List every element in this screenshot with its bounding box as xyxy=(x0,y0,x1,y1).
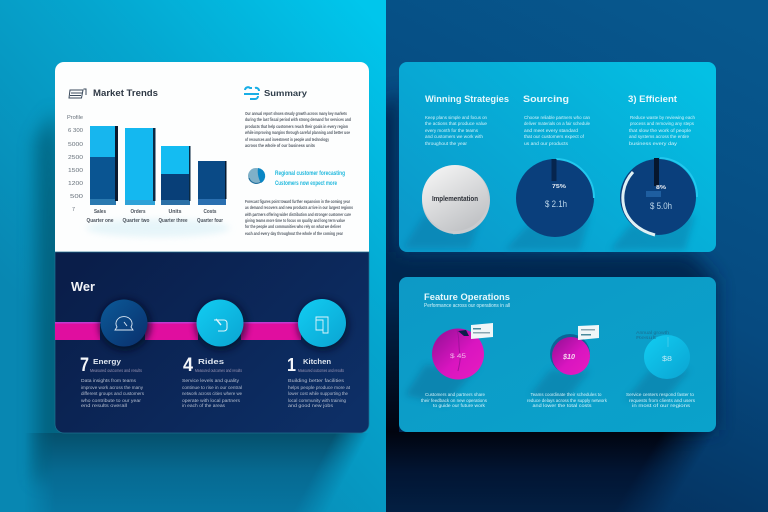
summary text block: of resources and investment in people and technology xyxy=(245,137,329,142)
summary text block: across the whole of our business units xyxy=(245,143,315,148)
icon: globe badge xyxy=(248,168,265,184)
column text: first: every month for the teams xyxy=(425,128,479,133)
summary text block: during the last fiscal period with strong demand for services and xyxy=(245,117,351,122)
y axis labels: Profile xyxy=(67,115,83,121)
callout text: Customers now expect more xyxy=(275,181,337,187)
step 2 text: 4 xyxy=(183,355,193,376)
callout text: Regional customer forecasting xyxy=(275,171,345,177)
step 2 node xyxy=(195,299,247,351)
panel subheading: Performance across our operations in all xyxy=(424,303,510,309)
detail text block: Forecast figures point toward further expansion in the coming year xyxy=(245,199,350,204)
step 2 text: network across cities where we xyxy=(182,391,242,396)
gauge: silver xyxy=(403,165,490,248)
step 2 text: Measured outcomes and results xyxy=(195,368,243,373)
bar 3 xyxy=(161,146,190,205)
sphere: cyan: $8 xyxy=(662,356,672,363)
caption: first: their feedback on new operations xyxy=(421,398,488,403)
step 2 text: Rides xyxy=(198,359,224,366)
column text: first: and customers we work with xyxy=(425,134,483,139)
icon: table xyxy=(69,89,86,98)
column headings: 3) Efficient xyxy=(628,94,677,104)
gauge: silver: Implementation xyxy=(432,196,478,203)
caption: first: to guide our future work xyxy=(433,403,486,408)
sphere: magenta small: $10 xyxy=(562,354,575,361)
sphere label: cyan: Annual growth xyxy=(636,330,670,335)
column headings: Sourcing xyxy=(523,94,569,104)
step 1 text: who contribute to our year xyxy=(81,398,142,403)
column text: second: Choose reliable partners who can xyxy=(524,115,590,120)
y axis labels: 7 xyxy=(72,207,75,213)
caption: second xyxy=(527,392,608,408)
column text: second: deliver materials on a fair schedule xyxy=(524,121,590,126)
bar 4 xyxy=(198,161,226,205)
column text: third: Reduce waste by reviewing each xyxy=(630,115,695,120)
step 1 text: Measured outcomes and results xyxy=(90,368,143,373)
panel: three gauges xyxy=(399,62,716,252)
caption: first xyxy=(421,392,488,408)
summary text block: products that help customers reach their goals in every region xyxy=(245,124,348,129)
y axis labels xyxy=(67,115,83,213)
step 3 text: helps people produce more at xyxy=(288,385,351,390)
summary text block xyxy=(244,111,351,148)
column text: second: and meet every standard xyxy=(524,128,579,133)
caption: second: Teams coordinate their schedules to xyxy=(530,392,602,397)
step 1 text xyxy=(80,355,145,408)
caption: third: in most of our regions xyxy=(632,403,691,408)
gauge: navy with white arc: 8% xyxy=(656,185,667,191)
summary text block: while improving margins through careful planning and better use xyxy=(244,130,350,135)
sphere: magenta large xyxy=(405,328,484,405)
detail text block xyxy=(244,199,353,236)
column text: third xyxy=(629,115,695,146)
step 1 text: 7 xyxy=(80,355,89,376)
step 2 text: continue to rise in our central xyxy=(182,385,242,390)
cast shadow: left panel below xyxy=(29,433,366,512)
y axis labels: 1500 xyxy=(68,168,83,174)
detail text block: giving teams more time to focus on quality and long term value xyxy=(245,218,345,223)
gauge: navy with white arc xyxy=(610,158,697,250)
step 1 text: end results overall xyxy=(81,403,127,408)
column text: third: that slow the work of people xyxy=(629,128,692,133)
summary heading: Summary xyxy=(264,88,307,98)
magenta ribbon xyxy=(55,322,305,340)
column text: third: process and removing any steps xyxy=(630,121,695,126)
bar labels: Quarter two xyxy=(122,218,150,224)
column text: first: Keep plans simple and focus on xyxy=(425,115,487,120)
column text: second xyxy=(524,115,590,146)
bar labels: Quarter four xyxy=(197,218,224,224)
glow under bar labels xyxy=(86,219,230,237)
panel: timeline xyxy=(55,252,369,433)
panel heading: Feature Operations xyxy=(424,292,510,302)
step 3 text: and good new jobs xyxy=(288,403,334,408)
step 3 text: local community with training xyxy=(288,398,346,403)
cast shadow: left panel side xyxy=(36,110,70,480)
column text: second: that our customers expect of xyxy=(524,134,585,139)
step 1 text: improve work across the many xyxy=(81,385,144,390)
gauge: navy xyxy=(505,159,594,250)
column text: third: business every day xyxy=(629,141,678,146)
y axis labels: 5000 xyxy=(68,142,83,148)
sphere label: cyan xyxy=(636,330,670,340)
bar labels: Units xyxy=(168,209,182,215)
step 3 text: lower cost while supporting the xyxy=(288,391,348,396)
caption: third: Service centers respond faster to xyxy=(626,392,694,397)
caption: second: and lower the total costs xyxy=(532,403,592,408)
gauge: navy: $ 2.1h xyxy=(545,199,567,209)
sphere label: cyan: Result xyxy=(636,335,657,340)
column text: first: throughout the year xyxy=(425,141,468,146)
step 1 text: Energy xyxy=(93,359,121,366)
sphere: magenta small xyxy=(530,334,590,402)
step 3 text xyxy=(287,355,351,408)
gauge: navy: 75% xyxy=(552,184,567,190)
bar labels: Quarter three xyxy=(158,218,188,224)
column text: first: the actions that produce value xyxy=(425,121,488,126)
step 3 text: Measured outcomes and results xyxy=(298,368,345,373)
bar labels xyxy=(86,209,224,224)
summary text block: Our annual report shows steady growth across many key markets xyxy=(245,111,347,116)
detail text block: as demand recovers and new products arrive in our largest regions xyxy=(245,205,353,210)
y axis labels: 500 xyxy=(70,194,83,200)
callout text xyxy=(275,171,345,187)
cast shadow: right gap darkening xyxy=(386,300,399,432)
bar labels: Orders xyxy=(130,209,146,215)
y axis labels: 1200 xyxy=(68,181,83,187)
caption: second: reduce delays across the supply network xyxy=(527,398,608,403)
column text: second: us and our products xyxy=(524,141,569,146)
bar labels: Quarter one xyxy=(86,218,114,224)
y axis labels: 6 300 xyxy=(68,128,83,134)
background: right half xyxy=(386,0,768,512)
panel: bar chart and summary xyxy=(55,62,369,252)
column text: first xyxy=(425,115,488,146)
bar chart xyxy=(67,115,226,224)
caption: first: Customers and partners share xyxy=(425,392,485,397)
detail text block: for the people and communities who rely on what we deliver xyxy=(245,224,341,229)
step 1 text: different groups and customers xyxy=(81,391,145,396)
chart heading: Market Trends xyxy=(93,88,158,98)
icon: summary links xyxy=(244,87,259,99)
sphere: cyan xyxy=(625,335,690,400)
gauge: navy with white arc: $ 5.0h xyxy=(650,201,672,211)
bar 2 xyxy=(125,128,156,205)
step 3 text: 1 xyxy=(287,355,296,375)
bar labels: Sales xyxy=(94,209,106,215)
step 2 text: in each of the areas xyxy=(182,403,226,408)
timeline heading: Wer xyxy=(71,279,95,294)
bar labels: Costs xyxy=(204,209,216,215)
step 2 text xyxy=(182,355,243,408)
cast shadow: right bottom panel xyxy=(386,432,711,512)
step 3 text: Building better facilities xyxy=(288,378,345,383)
step 2 text: operate with local partners xyxy=(182,398,241,403)
background: left half xyxy=(0,0,386,512)
caption: third: requests from clients and users xyxy=(629,398,696,403)
column headings xyxy=(425,94,677,104)
step 1 node xyxy=(99,299,151,351)
step 3 text: Kitchen xyxy=(303,359,331,366)
panel: three spheres xyxy=(399,277,716,432)
column text: third: and systems across the entire xyxy=(629,134,689,139)
step 1 text: Data insights from teams xyxy=(81,378,137,383)
tag: second xyxy=(578,325,599,340)
sphere: magenta large: $ 45 xyxy=(450,354,467,360)
step 3 node xyxy=(297,299,349,351)
caption: third xyxy=(626,392,696,408)
y axis labels: 2500 xyxy=(68,155,83,161)
column headings: Winning Strategies xyxy=(425,94,509,104)
step 2 text: Service levels and quality xyxy=(182,378,240,383)
detail text block: with partners offering wider distribution and stronger customer care xyxy=(244,212,351,217)
tag: first xyxy=(471,323,493,339)
bar 1 xyxy=(90,126,118,205)
cast shadow: right panels xyxy=(370,90,716,440)
detail text block: each and every day throughout the whole of the coming year xyxy=(245,231,343,236)
